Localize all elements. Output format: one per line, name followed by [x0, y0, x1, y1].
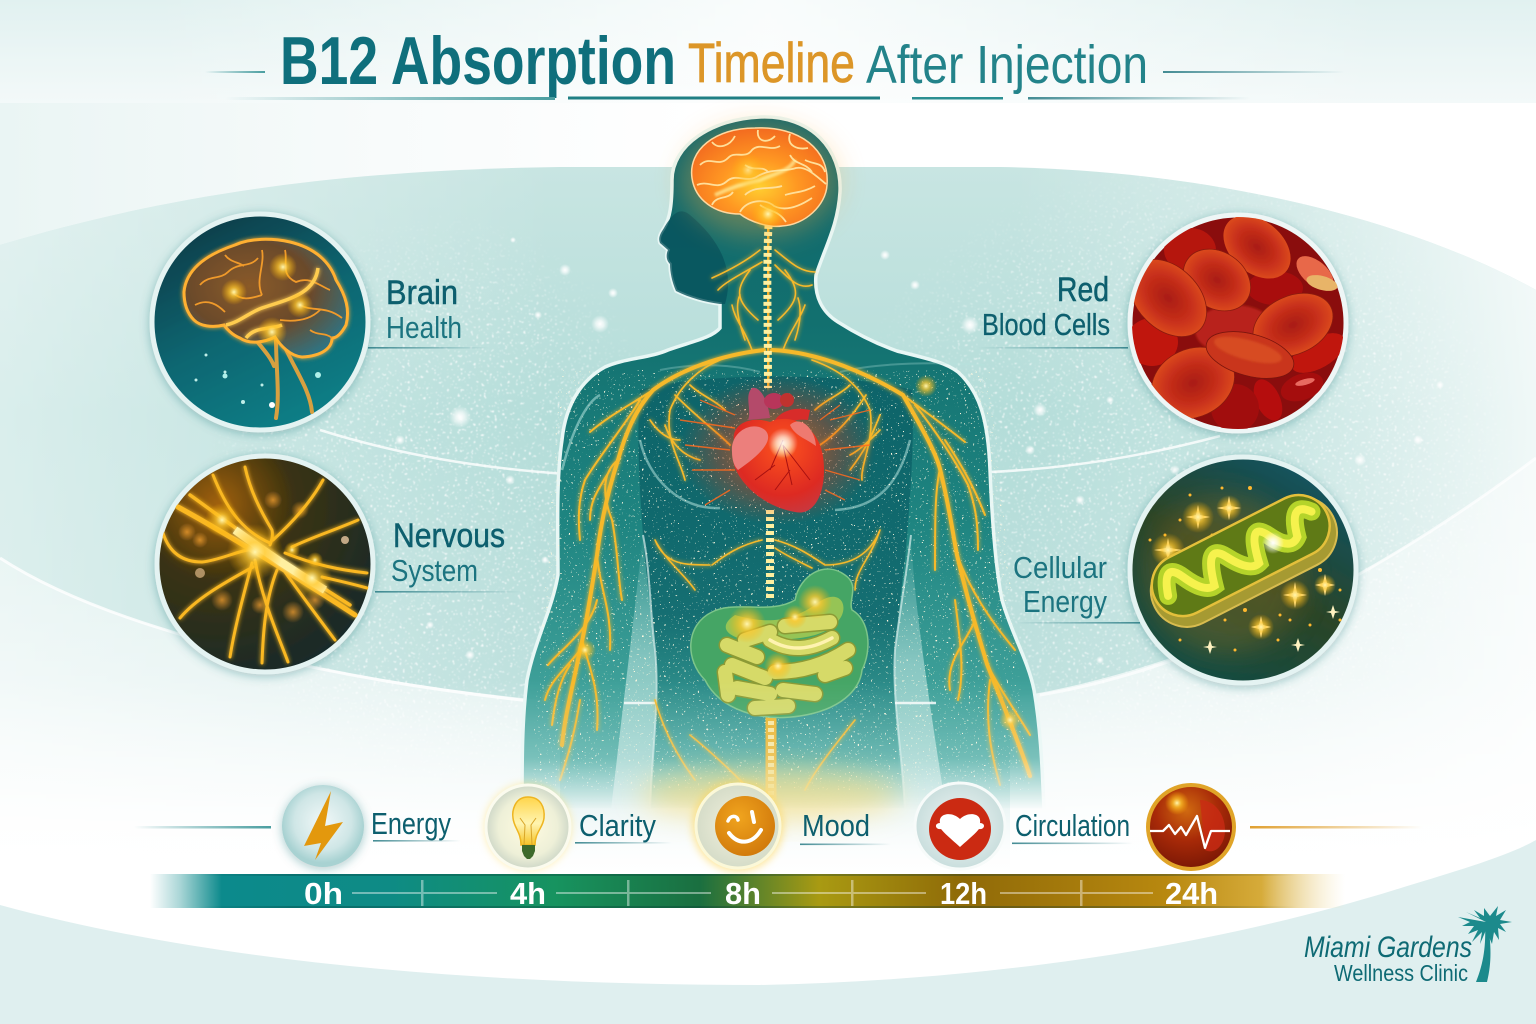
icon: light bulb: [484, 783, 572, 871]
timeline bar: [150, 874, 1345, 911]
label: Brain Health: Brain: [386, 274, 458, 312]
title: Timeline: Timeline: [688, 31, 855, 94]
label: Red Blood Cells: Blood Cells: [982, 307, 1110, 342]
icon: ECG heart: [1148, 785, 1234, 869]
panel: Brain Health: [152, 214, 488, 430]
label: Red Blood Cells: Red: [1057, 271, 1109, 309]
icon: smiley: [692, 780, 784, 872]
icon: mitochondrion circle: [1130, 457, 1356, 683]
sparkle field: [200, 160, 1530, 810]
label: Cellular Energy: Energy: [1023, 584, 1107, 619]
panel: Red Blood Cells: [978, 203, 1351, 432]
timeline milestones: [134, 780, 1423, 872]
label: 8h: 8h: [725, 876, 761, 911]
title: [205, 23, 1345, 100]
label: Circulation: Circulation: [1015, 808, 1130, 843]
label: Red Blood Cells: [978, 271, 1128, 349]
label: Energy: Energy: [371, 806, 451, 841]
label: Cellular Energy: Cellular: [1013, 550, 1107, 585]
logo: Miami Gardens Wellness Clinic: Miami Gardens: [1304, 931, 1472, 964]
label: Clarity: Clarity: [579, 808, 656, 843]
icon: brain circle: [152, 214, 368, 430]
label: Brain Health: [368, 274, 488, 349]
panel: Cellular Energy: [1013, 457, 1356, 683]
nerve network: [545, 250, 1030, 790]
label: Nervous System: [375, 517, 522, 593]
title: After Injection: After Injection: [866, 35, 1148, 95]
logo: Miami Gardens Wellness Clinic: Wellness Clinic: [1334, 960, 1468, 986]
label: Mood: Mood: [802, 808, 870, 843]
label: Brain Health: Health: [386, 310, 462, 345]
label: 0h: 0h: [304, 876, 343, 911]
spinal cord: [767, 218, 771, 800]
heart organ: [680, 375, 876, 525]
icon: energy bolt: [282, 785, 364, 867]
label: 4h: 4h: [510, 876, 546, 911]
torso sparkle: [530, 370, 1030, 790]
logo: Miami Gardens Wellness Clinic: [1304, 906, 1512, 986]
label: 12h: 12h: [940, 876, 987, 911]
icon: nerve circle: [157, 456, 373, 672]
icon: palm tree: [1458, 906, 1512, 982]
brain organ: [682, 124, 838, 236]
arm gaps: [611, 535, 657, 810]
icon: heart: [915, 783, 1005, 869]
human body figure: [522, 117, 1044, 810]
title: B12 Absorption: B12 Absorption: [280, 23, 676, 99]
icon: red blood cells circle: [1114, 203, 1351, 432]
label: 24h: 24h: [1165, 876, 1218, 911]
label: Nervous System: Nervous: [393, 517, 505, 555]
label: Nervous System: System: [391, 553, 478, 588]
torso shade: [638, 376, 913, 737]
digestive organs: [691, 569, 868, 718]
panel: Nervous System: [157, 456, 522, 672]
label: Cellular Energy: [1013, 550, 1140, 624]
